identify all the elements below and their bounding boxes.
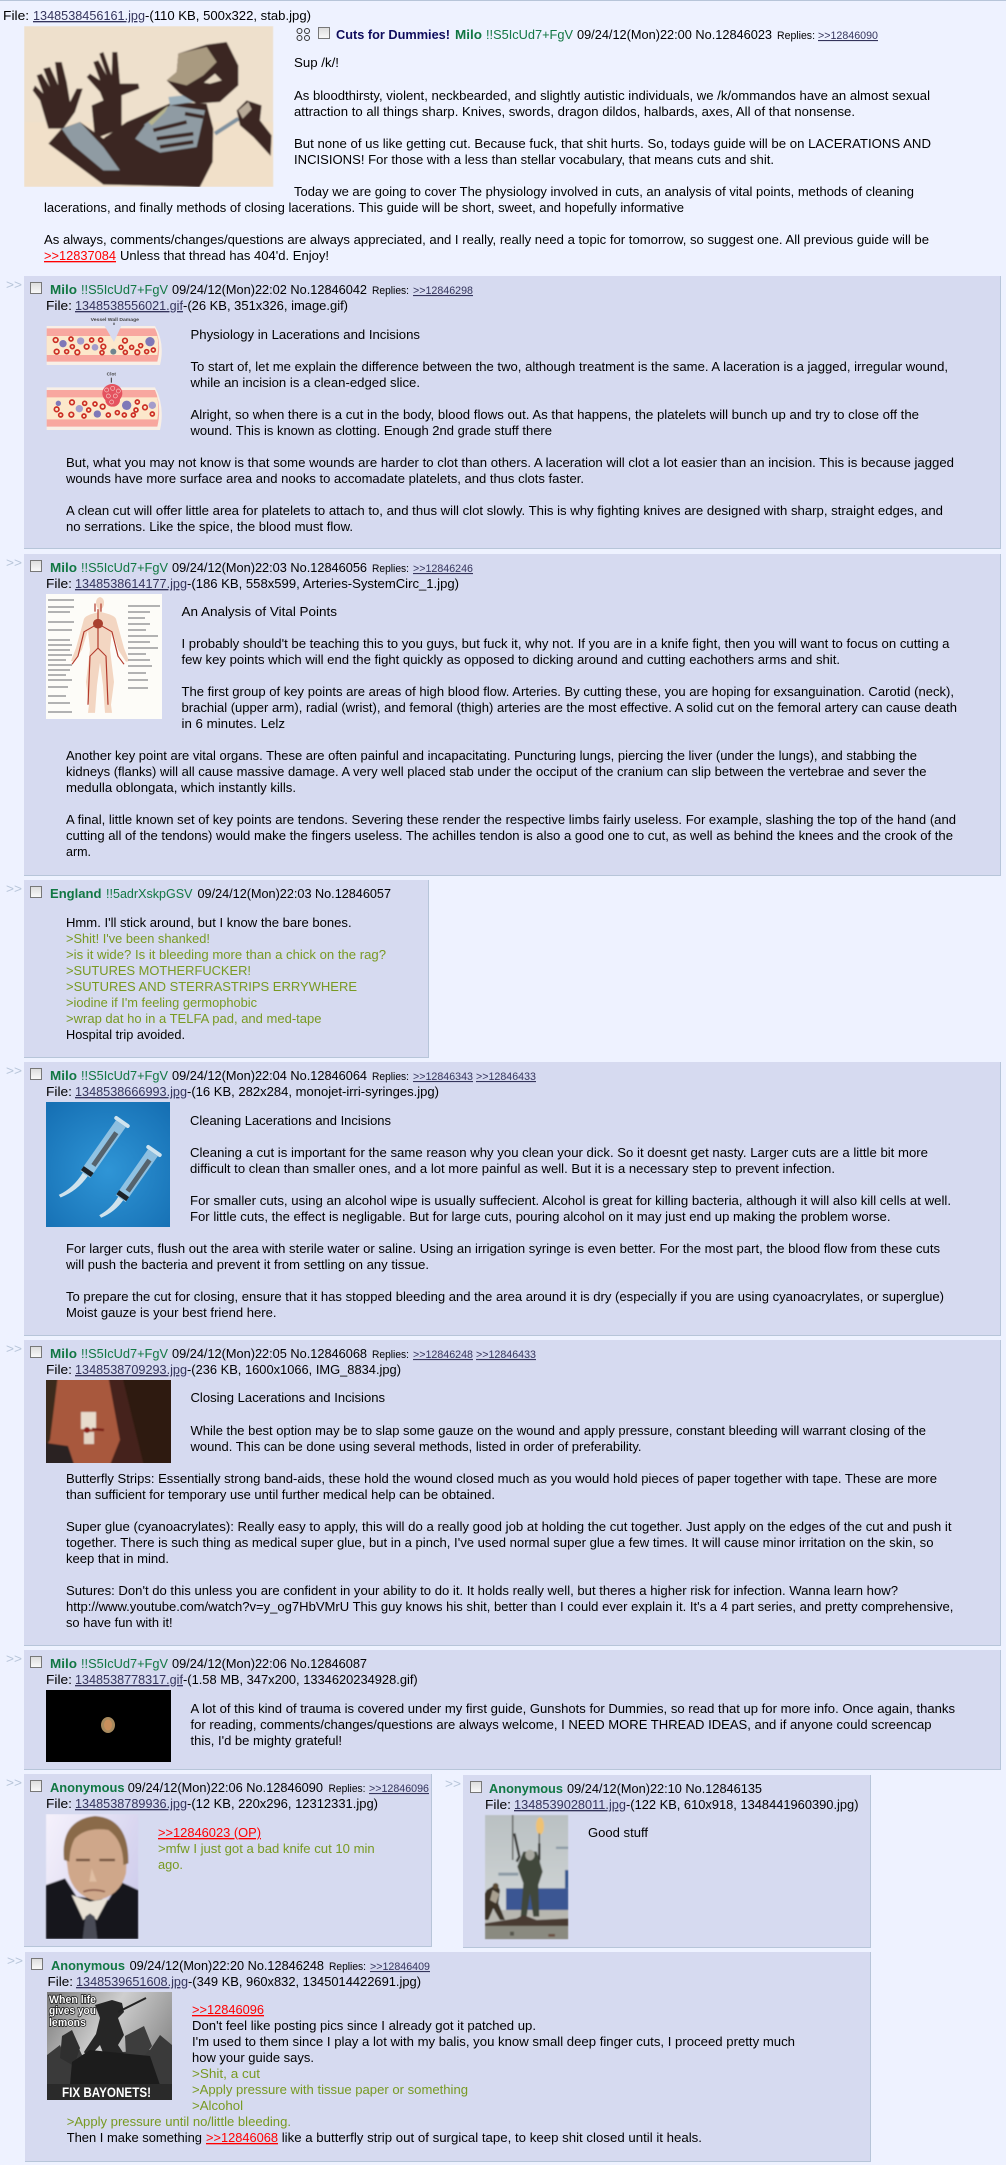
checkbox [30,560,42,572]
post body text: >iodine if I'm feeling germophobic [66,995,257,1010]
post header: !!S5IcUd7+FgV [81,1068,168,1083]
post body text: A final, little known set of key points are tendons. Severing these render the respective limbs fairly useless. For example, slashing the top of the hand (and [66,812,956,827]
post body text: To prepare the cut for closing, ensure that it has stopped bleeding and the area around it is dry (especially if you are using cyanoacrylates, or superglue) [66,1289,944,1304]
post body text: Butterfly Strips: Essentially strong band-aids, these hold the wound closed much as you would hold pieces of paper together with tape. These are more [66,1471,937,1486]
post body text: >>12846068 [206,2130,278,2145]
post header: Milo [50,1656,77,1671]
panel: reply on cleaning [6,1062,1001,1336]
post body text: >is it wide? Is it bleeding more than a chick on the rag? [66,947,386,962]
checkbox [30,886,42,898]
post body text: http://www.youtube.com/watch?v=y_og7HbVMrU This guy knows his shit, better than I could ever explain it. It's a 4 part series, and pretty comprehensive, [66,1599,953,1614]
post header: Replies: [329,1961,366,1973]
post body text: Super glue (cyanoacrylates): Really easy to apply, this will do a really good job at holding the cut together. Just apply on the edges of the cut and push it [66,1519,952,1534]
reply arrows: >> [7,1953,23,1968]
file info line: -(26 KB, 351x326, image.gif) [183,298,348,313]
post body text: But, what you may not know is that some wounds are harder to clot than others. A laceration will clot a lot easier than an incision. This is because jagged [66,455,954,470]
image: soldier firing rifles [485,1815,568,1939]
meme caption: FIX BAYONETS! [62,2084,151,2100]
post header: Replies: [777,30,815,42]
file info line: -(236 KB, 1600x1066, IMG_8834.jpg) [187,1362,401,1377]
post body text [66,604,957,859]
post body text: wounds have more surface area and nooks to accomadate platelets, and thus clots faster. [65,471,584,486]
post body text: in 6 minutes. Lelz [182,716,285,731]
file info line: -(122 KB, 610x918, 1348441960390.jpg) [626,1797,858,1812]
post body text: Cleaning a cut is important for the same reason why you clean your dick. So it doesnt get nasty. Larger cuts are a little bit more [190,1145,928,1160]
post header: !!S5IcUd7+FgV [486,27,573,42]
post body text: while an incision is a clean-edged slice. [190,375,420,390]
post body text: Hmm. I'll stick around, but I know the bare bones. [66,915,352,930]
file info line: File: [46,1796,72,1811]
reply arrows: >> [6,555,22,570]
post header: !!S5IcUd7+FgV [81,560,168,575]
panel: good stuff reply [445,1775,871,1948]
image: man being stabbed in the back [24,26,273,187]
meme caption: lemons [49,2017,86,2029]
post body text: Sutures: Don't do this unless you are confident in your ability to do it. It holds really well, but theres a higher risk for infection. Wanna learn how? [66,1583,898,1598]
post body text: no serrations. Like the spice, the blood must flow. [66,519,353,534]
post body text: Hospital trip avoided. [66,1027,185,1042]
icon: clover [297,28,310,40]
file info line: File: [46,1362,72,1377]
image: butterfly strip on arm [46,1380,171,1463]
post body text: To start of, let me explain the difference between the two, although treatment is the same. A laceration is a jagged, irregular wound, [190,359,948,374]
post body text: Alright, so when there is a cut in the body, blood flows out. As that happens, the platelets will bunch up and try to close off the [190,407,919,422]
file info line [46,1362,401,1377]
post header: >>12846096 [369,1783,429,1795]
reply arrows: >> [6,881,22,896]
image: fix bayonets meme [47,1992,172,2100]
post body text [65,327,954,534]
post body text: >SUTURES MOTHERFUCKER! [66,963,251,978]
post header [50,560,473,575]
post body text: Closing Lacerations and Incisions [190,1390,385,1405]
checkbox [30,282,42,294]
panel: original post [3,8,931,263]
file info line: 1348538789936.jpg [75,1796,187,1811]
file info line: File: [46,1084,72,1099]
file info line: File: [46,298,72,313]
post header: Replies: [372,1071,409,1083]
post body text: While the best option may be to slap some gauze on the wound and apply pressure, constant bleeding will warrant closing of the [190,1423,926,1438]
image: bullet hole on black [46,1690,171,1762]
post header: >>12846433 [476,1071,536,1083]
checkbox [32,1958,42,1970]
post header: Replies: [328,1783,366,1795]
checkbox [318,28,330,38]
panel: closing thanks reply [6,1650,1001,1770]
post header: >>12846433 [476,1349,536,1361]
post body text: Unless that thread has 404'd. Enjoy! [120,248,329,263]
post header [336,27,878,42]
meme caption [49,1994,151,2100]
post body text: difficult to clean than smaller ones, and a lot more painful as well. But it is a necessary step to prevent infection. [190,1161,835,1176]
post body text [158,1825,375,1872]
post header [50,1068,536,1083]
post header: !!S5IcUd7+FgV [81,1346,168,1361]
post body text: attraction to all things sharp. Knives, swords, dragon dildos, halbards, axes, All of that nonsense. [294,104,855,119]
file info line: -(1.58 MB, 347x200, 1334620234928.gif) [183,1672,418,1687]
image: blood vessel damage and clot diagram: Clot [107,371,116,376]
file info line [46,1084,439,1099]
file info line [46,1796,378,1811]
file info line: File: [3,8,33,23]
post body text: wound. This is known as clotting. Enough 2nd grade stuff there [190,423,552,438]
post header: >>12846343 [413,1071,473,1083]
reply arrows: >> [6,1341,22,1356]
post header [50,1780,429,1795]
file info line [485,1797,858,1812]
post body text [65,1113,951,1320]
panel: anonymous balisong reply [7,1952,871,2162]
post body text [67,2002,795,2145]
post header: Anonymous [489,1781,563,1796]
post header: 09/24/12(Mon)22:00 No.12846023 [577,27,772,42]
post body text: will push the bacteria and prevent it from settling on any tissue. [65,1257,429,1272]
post body text: ago. [158,1857,183,1872]
file info line: 1348538614177.jpg [75,576,187,591]
file info line: 1348538556021.gif [75,298,183,313]
post body text: Sup /k/! [294,55,339,70]
post body text: lacerations, and finally methods of closing lacerations. This guide will be short, sweet, and hopefully informative [44,200,684,215]
post body text: >mfw I just got a bad knife cut 10 min [158,1841,375,1856]
file info line: -(349 KB, 960x832, 1345014422691.jpg) [188,1974,421,1989]
post body text: >Apply pressure until no/little bleeding. [67,2114,291,2129]
file info line: 1348539028011.jpg [514,1797,626,1812]
post body text: As always, comments/changes/questions are always appreciated, and I really, really need a topic for tomorrow, so suggest one. All previous guide will be [44,232,929,247]
file info line: 1348538666993.jpg [75,1084,187,1099]
post header: 09/24/12(Mon)22:04 No.12846064 [172,1068,368,1083]
post header: Cuts for Dummies! [336,27,450,42]
file info line: File: [485,1797,511,1812]
post header: 09/24/12(Mon)22:06 No.12846090 [128,1780,323,1795]
post body text: Today we are going to cover The physiology involved in cuts, an analysis of vital points, methods of cleaning [294,184,914,199]
post body text [190,1701,955,1748]
post header: Replies: [372,285,409,297]
post header: Milo [50,1068,77,1083]
post body text: The first group of key points are areas of high blood flow. Arteries. By cutting these, you are hoping for exsanguination. Carotid (neck), [182,684,954,699]
post header: Replies: [372,563,409,575]
file info line [46,576,459,591]
post body text: Then I make something [67,2130,202,2145]
post header: Milo [50,560,77,575]
file info line: -(16 KB, 282x284, monojet-irri-syringes.jpg) [187,1084,439,1099]
post body text: >Shit, a cut [192,2066,260,2081]
post body text: I'm used to them since I play a lot with my balis, you know small deep finger cuts, I proceed pretty much [192,2034,795,2049]
post body text: Don't feel like posting pics since I already got it patched up. [192,2018,536,2033]
post body text: keep that in mind. [66,1551,169,1566]
post header: >>12846409 [370,1961,430,1973]
post header: >>12846246 [413,563,473,575]
post body text: INCISIONS! For those with a less than stellar vocabulary, that means cuts and shit. [294,152,774,167]
post body text: cutting all of the tendons) would make the fingers useless. The achilles tendon is also a good one to cut, as well as behind the knees and the crook of the [66,828,953,843]
meme caption: When life [49,1994,96,2006]
image: irrigation syringes [46,1102,170,1227]
post header [50,1656,367,1671]
file info line [46,298,348,313]
panel: reply on vital points [6,554,1001,876]
reply arrows: >> [445,1776,461,1791]
post body text: kidneys (flanks) will all cause massive damage. A very well placed stab under the occiput of the cranium can slip between the vertebrae and sever the [66,764,926,779]
post body text: than sufficient for temporary use until further medical help can be obtained. [66,1487,495,1502]
post body text: >>12846023 (OP) [158,1825,261,1840]
file info line: File: [46,576,72,591]
post header: !!S5IcUd7+FgV [81,1656,168,1671]
reply arrows: >> [6,1775,22,1790]
post body text: >Shit! I've been shanked! [66,931,210,946]
post header: !!5adrXskpGSV [106,886,193,901]
file info line: 1348539651608.jpg [76,1974,188,1989]
post body text: how your guide says. [192,2050,314,2065]
panel: reply on physiology [6,276,1001,549]
checkbox [30,1068,42,1080]
post header [51,1958,430,1973]
checkbox [470,1782,482,1792]
post body text: few key points which will end the fight quickly as opposed to dicking around and cutting eachothers arms and shit. [182,652,840,667]
post header: 09/24/12(Mon)22:03 No.12846056 [172,560,367,575]
post header: >>12846298 [413,285,473,297]
post body text: Moist gauze is your best friend here. [66,1305,276,1320]
post header: 09/24/12(Mon)22:03 No.12846057 [198,886,391,901]
file info line: 1348538456161.jpg [33,8,145,23]
post body text: >Alcohol [192,2098,243,2113]
image: arteries diagram [46,594,162,719]
post body text: >SUTURES AND STERRASTRIPS ERRYWHERE [66,979,357,994]
post body text: As bloodthirsty, violent, neckbearded, and slightly autistic individuals, we /k/ommandos have an almost sexual [294,88,930,103]
post body text: Another key point are vital organs. These are often painful and incapacitating. Puncturing lungs, piercing the liver (under the lungs), and stabbing the [66,748,917,763]
post body text [66,1390,953,1630]
post header [50,282,473,297]
checkbox [30,1656,42,1668]
checkbox [30,1346,42,1358]
image: blood vessel damage and clot diagram: Vessel Wall Damage [91,317,139,322]
file info line [48,1974,421,1989]
post header: Milo [50,1346,77,1361]
checkbox [30,1780,42,1792]
post body text: For larger cuts, flush out the area with sterile water or saline. Using an irrigation syringe is even better. For the most part, the blood flow from these cuts [66,1241,940,1256]
post body text: A lot of this kind of trauma is covered under my first guide, Gunshots for Dummies, so read that up for more info. Once again, thanks [190,1701,955,1716]
reply arrows: >> [6,277,22,292]
post body text: like a butterfly strip out of surgical tape, to keep shit closed until it heals. [282,2130,702,2145]
reply arrows: >> [6,1063,22,1078]
post body text: For smaller cuts, using an alcohol wipe is usually suffecient. Alcohol is great for killing bacteria, although it will also kill cells at well. [190,1193,951,1208]
post header: Anonymous [51,1958,125,1973]
post body text: A clean cut will offer little area for platelets to attach to, and thus will clot slowly. This is why fighting knives are designed with sharp, straight edges, and [66,503,943,518]
post body text: together. There is such thing as medical super glue, but in a pinch, I've used normal super glue a few times. It will cause minor irritation on the skin, so [66,1535,934,1550]
post header: 09/24/12(Mon)22:10 No.12846135 [567,1781,762,1796]
post body text: medulla oblongata, which instantly kills. [66,780,296,795]
post header: 09/24/12(Mon)22:02 No.12846042 [172,282,367,297]
post body text: arm. [66,844,91,859]
file info line: File: [48,1974,73,1989]
post body text [66,915,386,1042]
post body text: >wrap dat ho in a TELFA pad, and med-tape [66,1011,322,1026]
panel: anonymous knife cut reply [6,1774,432,1947]
post body text: so have fun with it! [66,1615,173,1630]
meme caption: gives you [49,2005,96,2017]
post header: 09/24/12(Mon)22:06 No.12846087 [172,1656,367,1671]
post header: England [50,886,102,901]
panel: reply on closing [6,1340,1001,1646]
post body text: this, I'd be mighty grateful! [190,1733,342,1748]
file info line: File: [46,1672,72,1687]
post body text: An Analysis of Vital Points [182,604,337,619]
file info line: -(110 KB, 500x322, stab.jpg) [145,8,311,23]
post header: 09/24/12(Mon)22:20 No.12846248 [130,1958,324,1973]
post body text: I probably should't be teaching this to you guys, but fuck it, why not. If you are in a knife fight, then you will want to focus on cutting a [182,636,950,651]
image: man in suit portrait [46,1814,138,1939]
post body text [44,55,931,263]
post body text: for reading, comments/changes/questions are always welcome, I NEED MORE THREAD IDEAS, and if anyone could screencap [190,1717,932,1732]
post body text: wound. This can be done using several methods, listed in order of preferability. [190,1439,641,1454]
post header: Milo [455,27,482,42]
post header: Anonymous [50,1780,124,1795]
file info line: 1348538778317.gif [75,1672,183,1687]
post header: Replies: [372,1349,409,1361]
post body text: Physiology in Lacerations and Incisions [190,327,420,342]
post body text: But none of us like getting cut. Because fuck, that shit hurts. So, todays guide will be on LACERATIONS AND [294,136,931,151]
post header [489,1781,762,1796]
post header: >>12846090 [818,30,878,42]
post body text: >>12846096 [192,2002,264,2017]
file info line: 1348538709293.jpg [75,1362,187,1377]
post body text: >Apply pressure with tissue paper or something [192,2082,468,2097]
post header: 09/24/12(Mon)22:05 No.12846068 [172,1346,367,1361]
post header: Milo [50,282,77,297]
post header: !!S5IcUd7+FgV [81,282,168,297]
post header: >>12846248 [413,1349,473,1361]
post body text: >>12837084 [44,248,117,263]
file info line [46,1672,418,1687]
post header [50,886,391,901]
post header [50,1346,536,1361]
post body text: brachial (upper arm), radial (wrist), and femoral (thigh) arteries are the most effective. A solid cut on the femoral artery can cause death [182,700,957,715]
reply arrows: >> [6,1651,22,1666]
image: blood vessel damage and clot diagram [47,317,162,430]
post body text: Cleaning Lacerations and Incisions [190,1113,391,1128]
file info line: -(12 KB, 220x296, 12312331.jpg) [187,1796,378,1811]
post body text: For little cuts, the effect is negligable. But for large cuts, pouring alcohol on it may just end up making the problem worse. [190,1209,890,1224]
post body text: Good stuff [588,1825,648,1840]
file info line [3,8,311,23]
panel: England reply [6,880,429,1058]
file info line: -(186 KB, 558x599, Arteries-SystemCirc_1.jpg) [187,576,459,591]
